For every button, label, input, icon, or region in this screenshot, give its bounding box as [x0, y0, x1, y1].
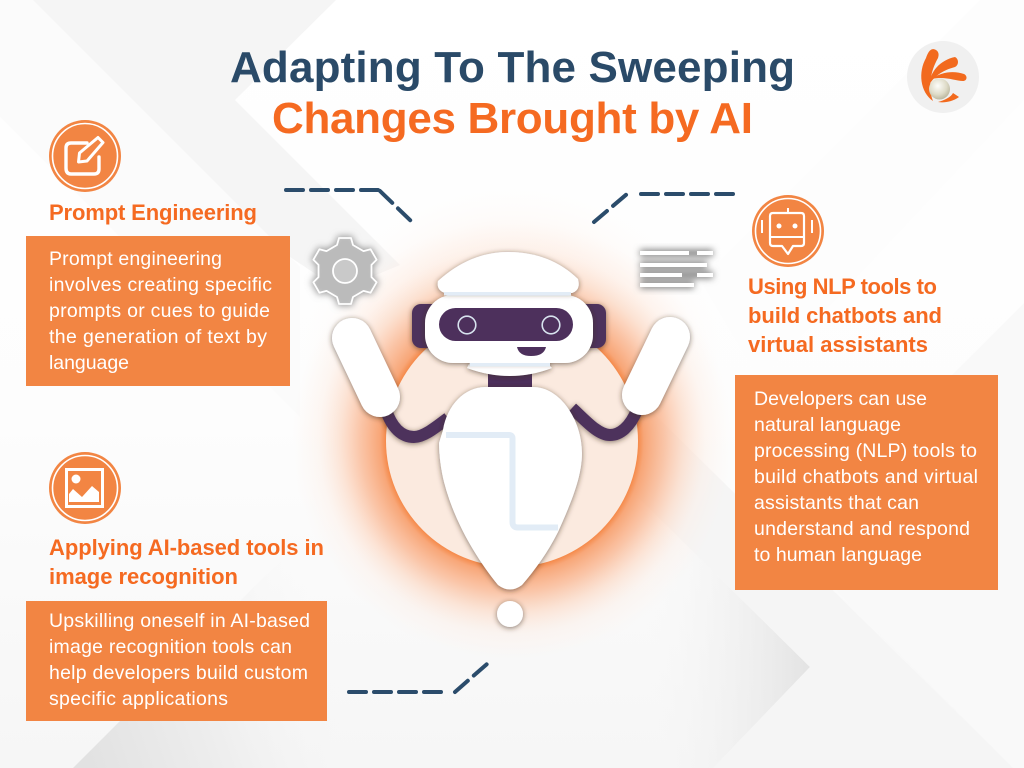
- bottom ball: [497, 601, 523, 627]
- heading: Applying AI-based tools in: [49, 535, 324, 560]
- text box: [735, 375, 998, 590]
- text box: the generation of text by: [49, 326, 267, 348]
- dome: [438, 252, 579, 293]
- dashed connector: top left: [286, 190, 412, 222]
- text box: to human language: [754, 544, 922, 566]
- heading: build chatbots and: [748, 303, 942, 328]
- heading: virtual assistants: [748, 332, 928, 357]
- chin: [467, 362, 552, 376]
- icon: chatbot: [752, 195, 824, 267]
- panel: image recognition: [26, 452, 327, 721]
- dome stripe: [444, 292, 571, 296]
- body chest line: [446, 435, 558, 528]
- text box: language: [49, 352, 129, 374]
- right arm: [572, 337, 670, 435]
- text box: understand and respond: [754, 518, 970, 540]
- neck: [488, 372, 532, 389]
- text box: Developers can use: [754, 388, 927, 410]
- heading: image recognition: [49, 564, 238, 589]
- text box: [26, 236, 290, 386]
- text box: Upskilling oneself in AI-based: [49, 610, 310, 632]
- text box: natural language: [754, 414, 901, 436]
- icon: pencil on note: [49, 120, 121, 192]
- eyes: [458, 316, 560, 334]
- peach disc: [386, 315, 638, 567]
- text box: processing (NLP) tools to: [754, 440, 977, 462]
- text box: build chatbots and virtual: [754, 466, 978, 488]
- visor: [439, 308, 573, 341]
- title: Changes Brought by AI: [272, 94, 753, 143]
- dashed connector: bottom: [349, 664, 487, 692]
- text box: image recognition tools can: [49, 636, 292, 658]
- text box: prompts or cues to guide: [49, 300, 270, 322]
- chin stripe: [470, 363, 550, 366]
- heading: [748, 274, 942, 357]
- title: [230, 43, 795, 143]
- logo: [907, 41, 979, 113]
- head: [425, 295, 593, 363]
- icon: image: [49, 452, 121, 524]
- robot: [352, 252, 670, 627]
- body: [439, 387, 582, 590]
- text box: Prompt engineering: [49, 248, 222, 270]
- text box: help developers build custom: [49, 662, 308, 684]
- dashed connector: top right: [594, 194, 735, 222]
- left arm: [352, 338, 448, 437]
- panel: prompt engineering: [26, 120, 290, 386]
- heading: [49, 535, 324, 589]
- ears: [412, 304, 606, 348]
- panel: NLP tools: [735, 195, 998, 590]
- text box: [26, 601, 327, 721]
- heading: Prompt Engineering: [49, 200, 257, 225]
- icon: gear: [313, 238, 377, 304]
- icon: text lines: [640, 253, 713, 285]
- heading: Using NLP tools to: [748, 274, 937, 299]
- text box: assistants that can: [754, 492, 919, 514]
- text box: specific applications: [49, 688, 228, 710]
- orange glow behind robot: [287, 175, 737, 661]
- smile: [517, 347, 546, 356]
- text box: involves creating specific: [49, 274, 272, 296]
- title: Adapting To The Sweeping: [230, 43, 795, 92]
